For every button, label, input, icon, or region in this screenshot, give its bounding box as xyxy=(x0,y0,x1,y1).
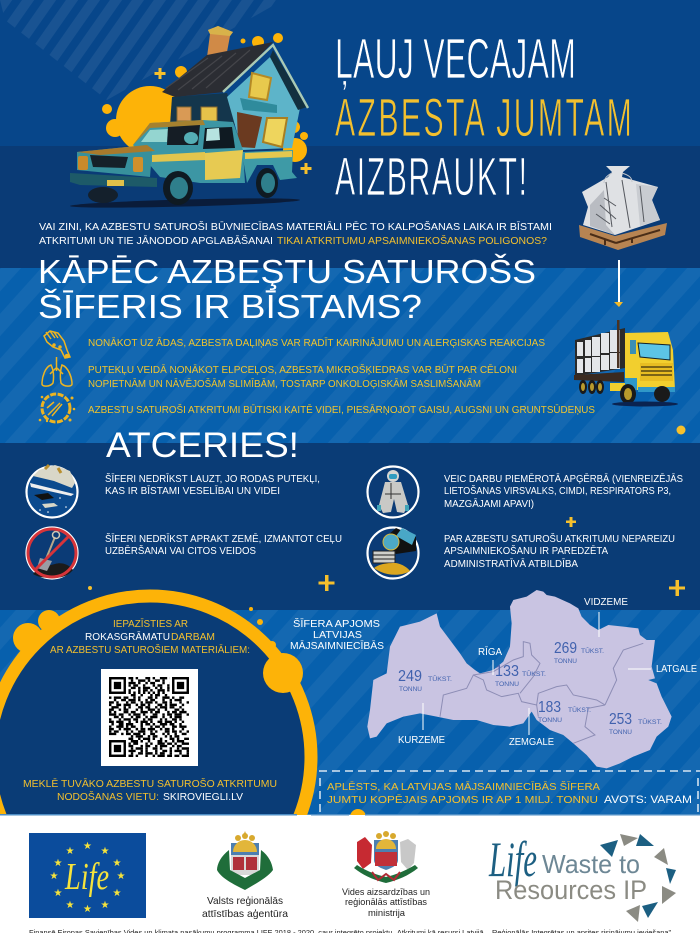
map data labels: TONNU xyxy=(495,681,519,688)
title: AZBESTA JUMTAM xyxy=(335,88,632,148)
map region names and leader lines: MĀJSAIMNIECĪBĀS xyxy=(290,640,384,652)
collection points text: MEKLĒ TUVĀKO AZBESTU SATUROŠO ATKRITUMU xyxy=(23,777,277,790)
logo: LIFE Waste to Resources IP: Resources IP xyxy=(495,875,647,905)
map region names and leader lines: LATVIJAS xyxy=(313,630,362,641)
logo: EU Life: Life xyxy=(64,856,109,898)
logo: regional development agency: Valsts reģionālās xyxy=(207,894,283,907)
logo: EU Life: ★ xyxy=(113,858,122,869)
warning texts: KAS IR BĪSTAMI VESELĪBAI UN VIDEI xyxy=(105,486,280,497)
warning texts: ŠĪFERI NEDRĪKST APRAKT ZEMĒ, IZMANTOT CEĻU xyxy=(105,534,342,545)
logo: regional development agency: attīstības aģentūra xyxy=(202,907,288,920)
collection points text xyxy=(23,777,277,803)
title: ĻAUJ VECAJAM xyxy=(335,26,576,90)
logo: EU Life: ★ xyxy=(66,846,75,857)
warning texts: ŠĪFERI NEDRĪKST LAUZT, JO RODAS PUTEKĻI, xyxy=(105,474,320,485)
logo: LIFE Waste to Resources IP: Waste to xyxy=(542,849,640,879)
hazard texts: PUTEKĻU VEIDĀ NONĀKOT ELPCEĻOS, AZBESTA MIKROŠĶIEDRAS VAR BŪT PAR CĒLONI xyxy=(88,363,517,376)
heading: why dangerous: ŠĪFERIS IR BĪSTAMS? xyxy=(38,288,422,325)
footer white xyxy=(0,814,700,933)
map data labels: TŪKST. xyxy=(581,647,604,655)
icon: hand xyxy=(44,331,70,358)
warning texts: UZBĒRŠANAI VAI CITOS VEIDOS xyxy=(105,546,256,557)
logo: EU Life: ★ xyxy=(113,888,122,899)
illustration: loaded truck xyxy=(574,320,678,406)
handbook text: AR AZBESTU SATUROŠIEM MATERIĀLIEM: xyxy=(50,643,250,656)
warning texts: APSAIMNIEKOŠANU IR PAREDZĒTA xyxy=(444,546,608,557)
hazard list xyxy=(39,331,595,422)
map data labels xyxy=(398,640,662,736)
callout: total volume: JUMTU KOPĒJAIS APJOMS IR AP 1 MILJ. TONNU xyxy=(327,794,598,806)
warning: do not break xyxy=(26,465,78,518)
handbook text xyxy=(50,618,250,656)
intro text xyxy=(39,220,552,247)
warning texts: MAZGĀJAMI APAVI) xyxy=(444,499,534,510)
decorative plus signs xyxy=(88,68,686,596)
warning: protective clothing xyxy=(368,466,418,518)
hazard texts: AZBESTU SATUROŠI ATKRITUMI BŪTISKI KAITĒ VIDEI, PIESĀRŅOJOT GAISU, AUGSNI UN GRUNTSŪDEŅUS xyxy=(88,403,595,416)
map region names and leader lines: LATGALE xyxy=(656,664,697,675)
intro text: TIKAI ATKRITUMU APSAIMNIEKOŠANAS POLIGONOS? xyxy=(277,234,547,247)
map: Latvia regions xyxy=(367,590,672,768)
logo: ministry: reģionālās attīstības xyxy=(345,897,427,908)
intro text: ATKRITUMI UN TIE JĀNODOD APGLABĀŠANAI xyxy=(39,234,273,247)
warning texts: VEIC DARBU PIEMĒROTĀ APĢĒRBĀ (VIENREIZĒJĀS xyxy=(444,474,683,485)
illustration: asbestos bag on pallet xyxy=(579,166,667,250)
title xyxy=(335,26,632,207)
warning texts: PAR AZBESTU SATUROŠU ATKRITUMU NEPAREIZU xyxy=(444,534,675,545)
callout: total volume: APLĒSTS, KA LATVIJAS MĀJSAIMNIECĪBĀS ŠĪFERA xyxy=(327,780,600,793)
map region names and leader lines: RĪGA xyxy=(478,646,502,658)
warning texts xyxy=(105,474,683,570)
logo: EU Life: ★ xyxy=(101,846,110,857)
logo: LIFE Waste to Resources IP xyxy=(488,831,676,922)
map data labels: TONNU xyxy=(609,729,632,736)
logo: EU Life: ★ xyxy=(50,871,59,882)
map data labels: TONNU xyxy=(399,686,422,693)
heading: why dangerous: KĀPĒC AZBEŞTU SATUROŠS xyxy=(38,253,536,290)
map region names and leader lines: ZEMGALE xyxy=(509,737,554,748)
hazard texts xyxy=(88,337,595,416)
handbook text: DARBAM xyxy=(171,632,215,643)
warning texts: ADMINISTRATĪVĀ ATBILDĪBA xyxy=(444,559,578,570)
map region names and leader lines xyxy=(290,597,697,748)
handbook text: IEPAZĪSTIES AR xyxy=(113,618,188,630)
heading: remember: ATCERIES! xyxy=(106,426,299,465)
logo: EU Life: ★ xyxy=(54,858,63,869)
icon: virus xyxy=(39,393,75,422)
arrow: bag to truck xyxy=(614,260,623,307)
map data labels: 249 xyxy=(398,668,422,685)
hazard texts: NONĀKOT UZ ĀDAS, AZBESTA DAĻIŅAS VAR RADĪT KAIRINĀJUMU UN ALERĢISKAS REAKCIJAS xyxy=(88,337,545,349)
map data labels: TŪKST. xyxy=(428,675,452,683)
warning texts: LIETOŠANAS VIRSVALKS, CIMDI, RESPIRATORS P3, xyxy=(444,486,671,497)
map data labels: 183 xyxy=(538,699,561,716)
warning: liability xyxy=(368,528,418,578)
callout: total volume xyxy=(319,771,700,814)
logo: EU Life: ★ xyxy=(54,888,63,899)
logo: ministry: Vides aizsardzības un xyxy=(342,887,430,898)
warning: do not bury xyxy=(26,528,78,578)
illustration: house on pickup truck xyxy=(70,26,308,210)
logo: EU Life xyxy=(29,833,146,918)
map region names and leader lines: VIDZEME xyxy=(584,597,628,608)
handbook text: ROKASGRĀMATU xyxy=(85,631,170,643)
title: AIZBRAUKT! xyxy=(335,147,527,207)
logo: LIFE Waste to Resources IP: Life xyxy=(488,831,537,887)
yellow ring panel xyxy=(0,596,366,918)
map region names and leader lines: ŠĪFERA APJOMS xyxy=(293,617,380,630)
collection points text: NODOŠANAS VIETU: xyxy=(57,790,159,803)
map data labels: 133 xyxy=(495,663,519,680)
map region names and leader lines: KURZEME xyxy=(398,735,445,746)
map data labels: TŪKST. xyxy=(522,670,546,678)
map data labels: 269 xyxy=(554,640,577,657)
logo: EU Life: ★ xyxy=(101,900,110,911)
logo: EU Life: ★ xyxy=(83,904,92,915)
map data labels: TŪKST. xyxy=(568,706,591,714)
hazard texts: NOPIETNĀM UN NĀVĒJOŠĀM SLIMĪBĀM, TOSTARP ONKOLOĢISKĀM SASLIMŠANĀM xyxy=(88,377,481,390)
heading: why dangerous xyxy=(38,253,536,325)
logo: ministry xyxy=(342,831,430,919)
callout: total volume: AVOTS: VARAM xyxy=(604,794,692,806)
map data labels: TŪKST. xyxy=(638,718,662,726)
map data labels: TONNU xyxy=(554,658,577,665)
logo: EU Life: ★ xyxy=(117,871,126,882)
logo: regional development agency xyxy=(202,831,288,920)
intro text: VAI ZINI, KA AZBESTU SATUROŠI BŪVNIECĪBAS MATERIĀLI PĒC TO KALPOŠANAS LAIKA IR BĪSTAMI xyxy=(39,220,552,233)
map data labels: TONNU xyxy=(538,717,562,724)
logo: EU Life: ★ xyxy=(83,841,92,852)
logo: ministry: ministrija xyxy=(368,908,406,919)
map data labels: 253 xyxy=(609,711,632,728)
logo: EU Life: ★ xyxy=(66,900,75,911)
collection points text: SKIROVIEGLI.LV xyxy=(163,791,243,803)
icon: lungs xyxy=(42,357,72,386)
QR code xyxy=(101,669,198,766)
